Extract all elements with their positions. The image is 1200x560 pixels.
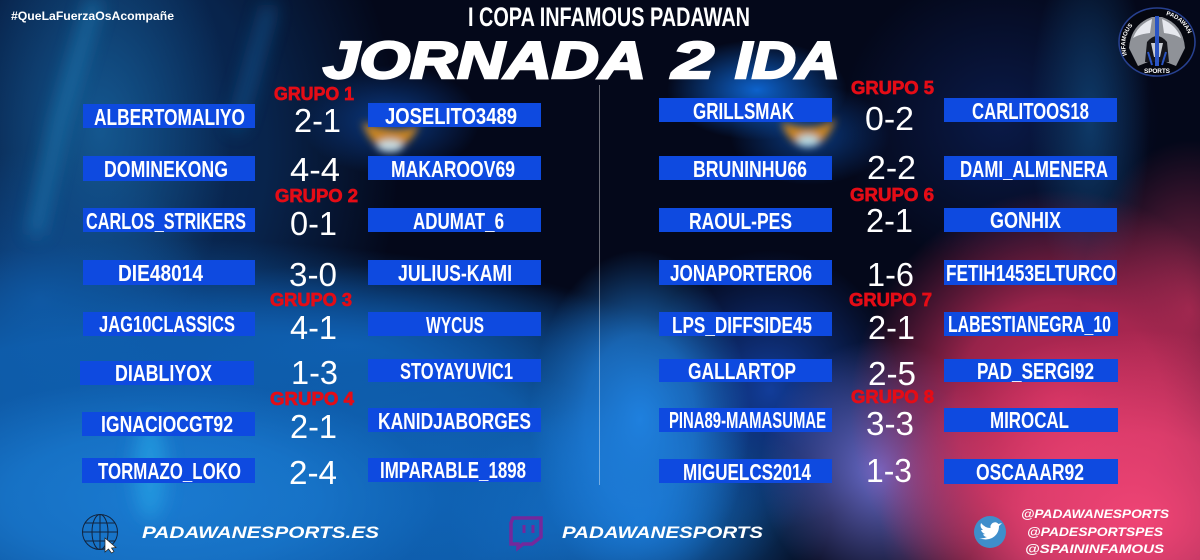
- match: Lps_Diffside45 vs Labestianegra_10: LABESTIANEGRA_10: [948, 311, 1111, 337]
- match: Lps_Diffside45 vs Labestianegra_10: [659, 309, 1118, 346]
- match: Miguelcs2014 vs Oscaaar92: [659, 452, 1118, 489]
- competition title: I COPA INFAMOUS PADAWAN: [468, 2, 750, 32]
- logo: Infamous Padawan Sports: PADAWAN: [1166, 11, 1192, 34]
- group 6 label: GRUPO 6: [850, 185, 934, 205]
- twitter handles: @PADESPORTSPES: [1027, 525, 1163, 539]
- match: Jonaportero6 vs Fetih1453elturco: JONAPORTERO6: [670, 260, 812, 286]
- match: Dominekong vs Makaroov69: [83, 151, 541, 188]
- match: Grillsmak vs Carlitoos18: 0-2: [865, 100, 914, 137]
- twitter handles: [1021, 507, 1169, 556]
- match: Gallartop vs Pad_Sergi92: GALLARTOP: [688, 358, 796, 384]
- match: Bruninhu66 vs Dami_Almenera: 2-2: [867, 149, 916, 186]
- match: Diabliyox vs Stoyayuvic1: [80, 354, 541, 391]
- match: Albertomaliyo vs Joselito3489: JOSELITO3489: [385, 103, 517, 129]
- match: Dominekong vs Makaroov69: 4-4: [290, 151, 340, 188]
- group 5 label: GRUPO 5: [851, 78, 934, 98]
- match: Jag10classics vs Wycus: [83, 309, 541, 346]
- match: Gallartop vs Pad_Sergi92: [659, 355, 1118, 392]
- match: Miguelcs2014 vs Oscaaar92: 1-3: [866, 452, 912, 489]
- twitch handle: PADAWANESPORTS: [562, 523, 764, 542]
- twitter handles: @SPAININFAMOUS: [1025, 542, 1164, 556]
- match: Bruninhu66 vs Dami_Almenera: [659, 149, 1117, 186]
- logo: Infamous Padawan Sports: SPORTS: [1144, 68, 1171, 75]
- match: Die48014 vs Julius-Kami: 3-0: [289, 256, 337, 293]
- match: Diabliyox vs Stoyayuvic1: 1-3: [291, 354, 338, 391]
- match: Jonaportero6 vs Fetih1453elturco: [659, 256, 1117, 293]
- match: Tormazo_Loko vs Imparable_1898: TORMAZO_LOKO: [98, 458, 241, 484]
- match: Raoul-Pes vs Gonhix: RAOUL-PES: [689, 208, 792, 234]
- match: Diabliyox vs Stoyayuvic1: STOYAYUVIC1: [400, 358, 513, 384]
- match: Grillsmak vs Carlitoos18: [659, 98, 1117, 137]
- match: Ignaciocgt92 vs Kanidjaborges: IGNACIOCGT92: [101, 411, 233, 437]
- match: Raoul-Pes vs Gonhix: GONHIX: [990, 207, 1062, 233]
- match: Grillsmak vs Carlitoos18: CARLITOOS18: [972, 98, 1089, 124]
- match: Jag10classics vs Wycus: 4-1: [290, 309, 337, 346]
- match: Gallartop vs Pad_Sergi92: 2-5: [868, 355, 916, 392]
- match: Miguelcs2014 vs Oscaaar92: MIGUELCS2014: [683, 459, 811, 485]
- match: Raoul-Pes vs Gonhix: [659, 202, 1117, 239]
- icon: twitter: [974, 516, 1006, 548]
- match: Albertomaliyo vs Joselito3489: 2-1: [294, 102, 341, 139]
- match: Ignaciocgt92 vs Kanidjaborges: KANIDJABORGES: [378, 408, 531, 434]
- twitter handles: @PADAWANESPORTS: [1021, 507, 1169, 521]
- match: Carlos_Strikers vs Adumat_6: 0-1: [290, 205, 337, 242]
- logo: Infamous Padawan Sports: [1118, 7, 1196, 77]
- eye: right: [781, 118, 836, 147]
- match: Bruninhu66 vs Dami_Almenera: BRUNINHU66: [693, 156, 807, 182]
- icon: globe with cursor: [82, 514, 118, 553]
- match: Ignaciocgt92 vs Kanidjaborges: 2-1: [290, 408, 337, 445]
- match: Bruninhu66 vs Dami_Almenera: DAMI_ALMENERA: [960, 156, 1108, 182]
- match: Dominekong vs Makaroov69: MAKAROOV69: [391, 156, 515, 182]
- logo: Infamous Padawan Sports: INFAMOUS: [1121, 23, 1132, 56]
- eye: left: [362, 122, 420, 152]
- icon: twitch: [511, 518, 541, 548]
- match: Carlos_Strikers vs Adumat_6: ADUMAT_6: [413, 208, 504, 234]
- main heading: [323, 32, 840, 90]
- website: PADAWANESPORTS.ES: [142, 523, 380, 542]
- match: Diabliyox vs Stoyayuvic1: DIABLIYOX: [115, 360, 213, 386]
- match: Die48014 vs Julius-Kami: DIE48014: [118, 260, 203, 286]
- match: Pina89-Mamasumae vs Mirocal: MIROCAL: [990, 407, 1069, 433]
- match: Pina89-Mamasumae vs Mirocal: 3-3: [866, 405, 914, 442]
- match: Lps_Diffside45 vs Labestianegra_10: LPS_DIFFSIDE45: [672, 312, 812, 338]
- match: Carlos_Strikers vs Adumat_6: [83, 205, 541, 242]
- match: Jonaportero6 vs Fetih1453elturco: 1-6: [867, 256, 914, 293]
- match: Miguelcs2014 vs Oscaaar92: OSCAAAR92: [976, 459, 1084, 485]
- main heading: IDA: [735, 32, 840, 90]
- match: Tormazo_Loko vs Imparable_1898: 2-4: [289, 454, 337, 491]
- match: Die48014 vs Julius-Kami: [83, 256, 541, 293]
- match: Grillsmak vs Carlitoos18: GRILLSMAK: [693, 98, 794, 124]
- group 4 label: GRUPO 4: [270, 389, 354, 409]
- group 1 label: GRUPO 1: [274, 84, 354, 104]
- match: Die48014 vs Julius-Kami: JULIUS-KAMI: [398, 260, 512, 286]
- match: Pina89-Mamasumae vs Mirocal: [659, 405, 1118, 442]
- group 3 label: GRUPO 3: [270, 290, 352, 310]
- match: Lps_Diffside45 vs Labestianegra_10: 2-1: [868, 309, 915, 346]
- match: Dominekong vs Makaroov69: DOMINEKONG: [104, 156, 228, 182]
- match: Tormazo_Loko vs Imparable_1898: [82, 454, 541, 491]
- main heading: 2: [671, 32, 714, 90]
- match: Carlos_Strikers vs Adumat_6: CARLOS_STRIKERS: [86, 208, 246, 234]
- group 8 label: GRUPO 8: [851, 387, 934, 407]
- match: Jag10classics vs Wycus: WYCUS: [426, 312, 484, 338]
- match: Raoul-Pes vs Gonhix: 2-1: [866, 202, 913, 239]
- match: Jonaportero6 vs Fetih1453elturco: FETIH1453ELTURCO: [946, 260, 1116, 286]
- main heading: JORNADA: [323, 32, 646, 90]
- group 7 label: GRUPO 7: [849, 290, 932, 310]
- match: Pina89-Mamasumae vs Mirocal: PINA89-MAMASUMAE: [669, 407, 826, 433]
- group 2 label: GRUPO 2: [275, 186, 358, 206]
- match: Jag10classics vs Wycus: JAG10CLASSICS: [99, 311, 235, 337]
- match: Tormazo_Loko vs Imparable_1898: IMPARABLE_1898: [380, 457, 526, 483]
- hashtag: #QueLaFuerzaOsAcompañe: [11, 9, 174, 23]
- match: Albertomaliyo vs Joselito3489: [83, 102, 541, 139]
- match: Ignaciocgt92 vs Kanidjaborges: [82, 408, 541, 445]
- match: Albertomaliyo vs Joselito3489: ALBERTOMALIYO: [94, 104, 245, 130]
- match: Gallartop vs Pad_Sergi92: PAD_SERGI92: [977, 358, 1094, 384]
